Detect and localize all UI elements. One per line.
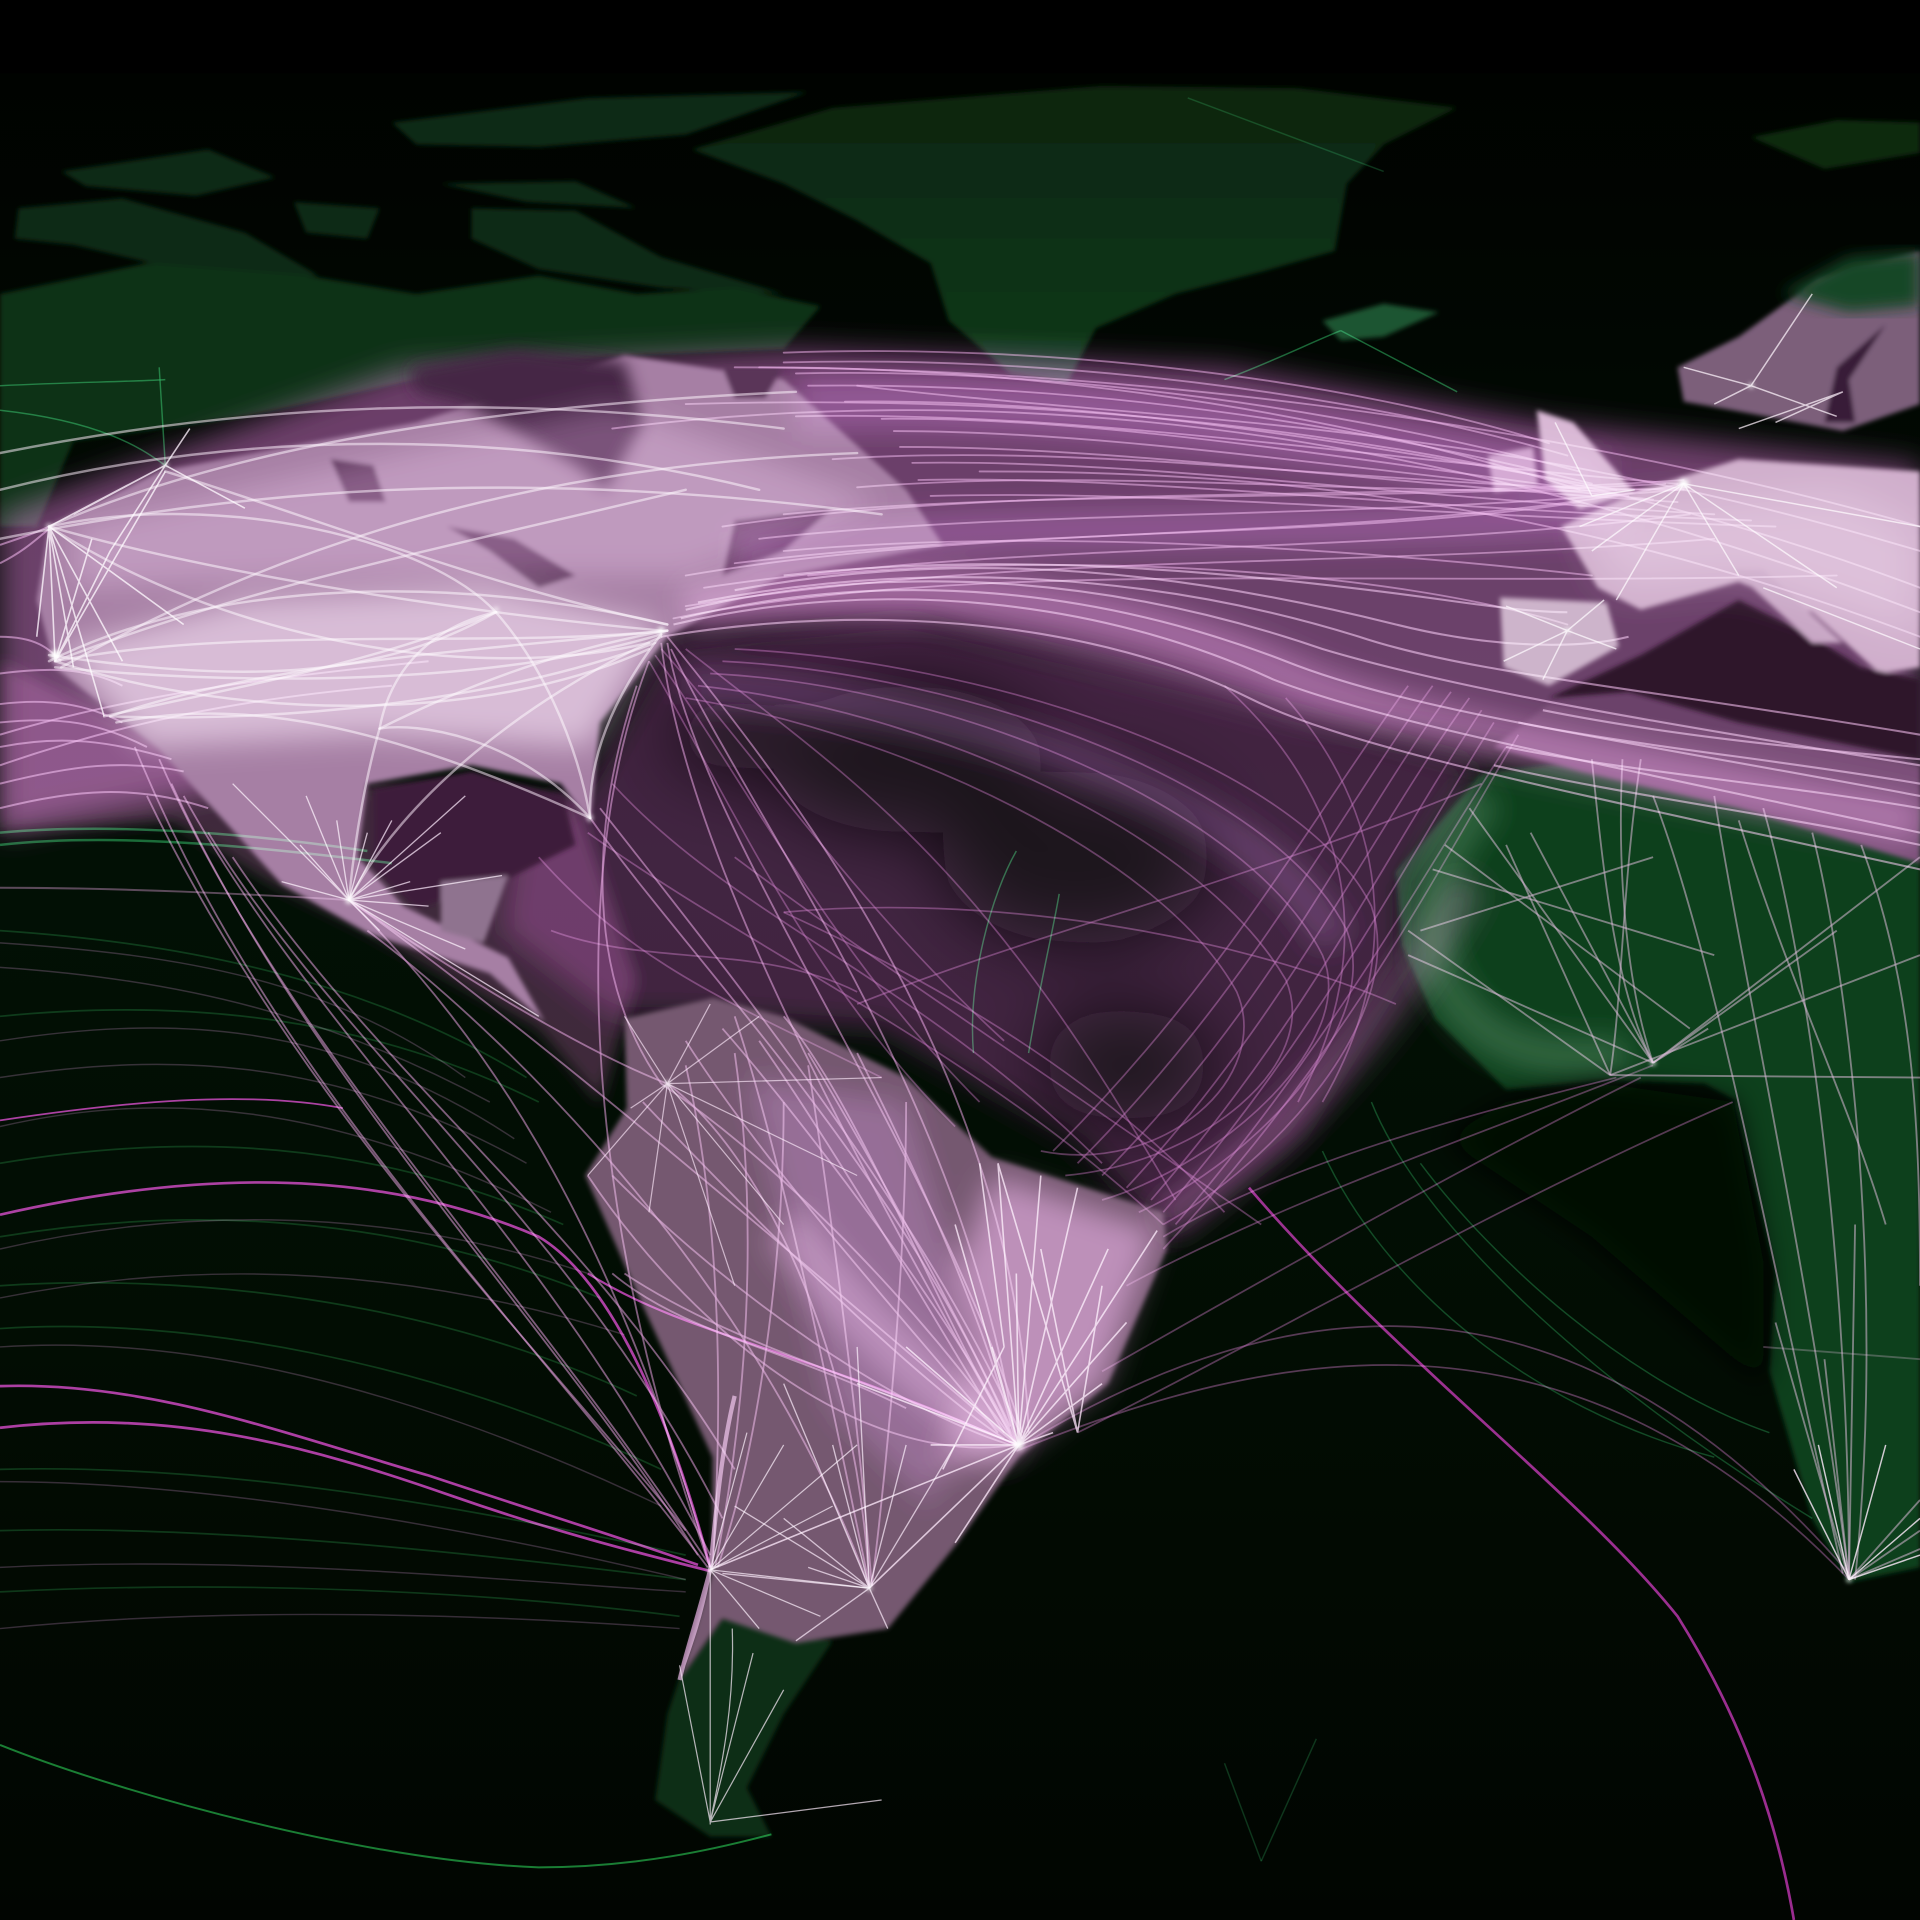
Europe land (1488, 251, 1920, 863)
Mediterranean cutout (1549, 600, 1920, 759)
Hudson Bay dark cutout (410, 349, 643, 490)
North America pink land (37, 349, 943, 1022)
hub fan: Mexico City (233, 784, 539, 1016)
bright haze over Brazil (747, 1078, 1157, 1506)
Greenland (692, 86, 1457, 382)
bright white North American core (61, 404, 882, 747)
Great Lakes dark cutout (331, 367, 833, 588)
dark pockets in the central Atlantic (673, 686, 1212, 1120)
soft bright glow along Europe (1580, 490, 1920, 637)
dark gulf of Guinea shadow (1445, 1084, 1763, 1384)
bright arcs from North America to southern Europe and Africa (661, 564, 1920, 869)
hub fan: Santiago (680, 1396, 882, 1824)
Siberia fragment (1751, 120, 1920, 169)
hub fan: Sao Paulo and Rio (710, 1163, 1157, 1588)
Africa south (1734, 1102, 1920, 1582)
Great Britain (1537, 410, 1635, 509)
Gulf of Mexico cutout (373, 771, 576, 909)
bright North American corridor (0, 392, 882, 900)
Africa north (1396, 759, 1920, 1117)
hub fan: Seattle and Los Angeles (37, 429, 245, 716)
Patagonia (655, 1616, 833, 1837)
hub fan: Bogota (588, 1004, 882, 1286)
transatlantic flight band (612, 351, 1920, 637)
purple haze over the North Atlantic (0, 349, 1920, 833)
Baltic sea cutout (1824, 324, 1886, 422)
routes from North America to South America (135, 637, 1029, 1588)
northern Canada and Alaska (0, 263, 820, 527)
Pacific flights west of North America (0, 527, 429, 900)
South America pink land (585, 998, 1167, 1680)
Canadian Arctic archipelago (15, 92, 808, 294)
Central America land (441, 876, 508, 943)
central Atlantic arcs between Europe, Africa and the Americas (539, 649, 1849, 1580)
Scandinavia (1678, 251, 1920, 431)
purple haze over the Caribbean and eastern Pacific (0, 661, 637, 1102)
Iberia (1500, 598, 1619, 686)
Patagonian green line (0, 1745, 771, 1867)
North Africa coast band (1494, 704, 1920, 863)
purple haze over the central Atlantic (502, 618, 1482, 1237)
faint green arcs across the South Pacific (0, 931, 686, 1616)
top vignette (0, 0, 1920, 73)
hub fan: Johannesburg (1794, 1445, 1920, 1580)
soft glowing bands of routes (686, 402, 1920, 1445)
hub fan: European cities (1504, 294, 1920, 680)
magenta routes across the South Pacific (0, 1099, 1794, 1920)
Iceland (1322, 304, 1439, 340)
bright hub glows (47, 383, 1851, 1591)
routes crossing Africa (1408, 759, 1920, 1580)
continental Europe (1561, 459, 1920, 673)
hub fan: Buenos Aires (722, 1347, 955, 1641)
Scandinavian green edge (1782, 251, 1920, 312)
Ireland (1488, 447, 1538, 492)
long faint southern Pacific arcs (0, 943, 686, 1629)
Italy (1733, 569, 1843, 643)
pale haze on the west African coast (1430, 796, 1629, 1057)
